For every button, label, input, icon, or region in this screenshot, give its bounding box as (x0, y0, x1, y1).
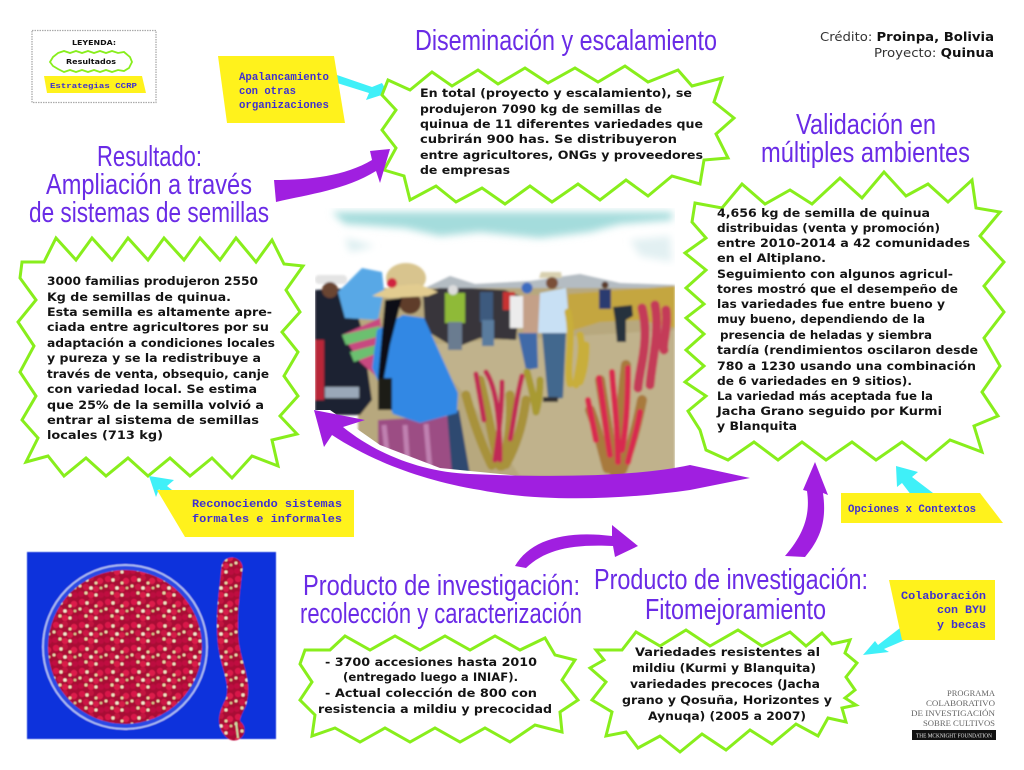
heading: recolección: recolección y caracterización (300, 598, 582, 630)
panel: validación: Jacha Grano seguido por Kurmi (716, 405, 942, 418)
panel: resultado: 3000 familias produjeron 2550 (47, 275, 258, 288)
panel: validación: presencia de heladas y siembra (720, 329, 932, 342)
panel: diseminación: de empresas (420, 164, 510, 177)
legend: Estrategias CCRP (50, 83, 138, 91)
label: opciones por contextos (841, 493, 1003, 523)
heading: resultado (29, 141, 269, 229)
person in beige (518, 282, 540, 370)
label: colaboración: y becas (937, 620, 986, 632)
heading: fitomejoramiento: Producto de investigación: (594, 564, 868, 596)
legend (32, 30, 156, 102)
photo: farmers in quinoa field (315, 208, 675, 478)
heading: resultado: Resultado: (97, 141, 202, 173)
panel: validación: y Blanquita (717, 420, 797, 433)
panel: diseminación (382, 66, 734, 204)
logo: programa colaborativo: DE INVESTIGACIÓN (911, 708, 995, 718)
credit: Crédito: Proinpa, Bolivia (820, 30, 994, 44)
legend: Resultados (66, 57, 117, 66)
panel: recolección (300, 636, 578, 742)
logo: programa colaborativo: SOBRE CULTIVOS (923, 719, 995, 728)
panel: validación: tardía (rendimientos oscilaron desde (717, 344, 978, 357)
heading: fitomejoramiento: Fitomejoramiento (645, 594, 826, 626)
logo: programa colaborativo (911, 689, 996, 740)
heading: recolección (300, 570, 582, 630)
panel: validación: La variedad más aceptada fue la (717, 390, 933, 403)
panel: resultado: locales (713 kg) (47, 429, 163, 442)
logo: programa colaborativo: PROGRAMA (947, 689, 995, 698)
panel: resultado: que 25% de la semilla volvió a (47, 399, 264, 412)
title: diseminación: Diseminación y escalamiento (415, 25, 717, 57)
heading: fitomejoramiento (594, 564, 868, 626)
panel: fitomejoramiento: variedades precoces (Jacha (630, 678, 820, 691)
panel: resultado: con variedad local. Se estima (47, 383, 257, 396)
panel: validación: 780 a 1230 usando una combinación (717, 360, 976, 373)
legend: LEYENDA: (72, 38, 116, 47)
panel: fitomejoramiento: Variedades resistentes al (635, 646, 820, 659)
label: colaboración: Colaboración (901, 591, 986, 603)
panel: validación: entre 2010-2014 a 42 comunidades (717, 237, 970, 250)
arrow: recolección to fitomejoramiento (515, 525, 638, 568)
crowd behind (423, 288, 520, 348)
panel: resultado: ciada entre agricultores por su (47, 321, 269, 334)
quinoa plants (466, 305, 666, 472)
panel: diseminación: cubrirán 900 has. Se distribuyeron (420, 133, 677, 146)
arrow: validación to resultado (large) (314, 410, 750, 498)
credit: Proyecto: Quinua (874, 46, 994, 60)
panel: resultado (18, 238, 303, 478)
woman in blue (372, 263, 470, 474)
panel: recolección: - Actual colección de 800 con (325, 687, 537, 700)
logo: programa colaborativo: COLABORATIVO (926, 699, 995, 708)
panel: validación: muy bueno, dependiendo de la (717, 313, 925, 326)
label: opciones por contextos: Opciones x Contextos (848, 504, 976, 516)
heading: resultado: de sistemas de semillas (29, 197, 269, 229)
label: reconociendo: formales e informales (192, 514, 342, 526)
credit (820, 30, 994, 60)
panel: validación: Seguimiento con algunos agricul- (717, 268, 953, 281)
label: apalancamiento: Apalancamiento (239, 72, 329, 84)
label: apalancamiento (218, 56, 345, 123)
panel: validación: tores mostró que el desempeño de (717, 283, 958, 296)
panel: diseminación: entre agricultores, ONGs y proveedores (420, 149, 703, 162)
panel: validación: en el Altiplano. (717, 252, 826, 265)
panel: validación: las variedades fue entre bueno y (717, 298, 946, 311)
photo: quinoa seeds on blue (27, 552, 276, 739)
label: reconociendo: Reconociendo sistemas (192, 499, 342, 511)
panel: diseminación: quinua de 11 diferentes variedades que (420, 118, 703, 131)
panel: validación: de 6 variedades en 9 sitios). (717, 375, 912, 388)
back people (599, 289, 611, 309)
panel: diseminación: En total (proyecto y escalamiento), se (420, 87, 692, 100)
arrow: opciones to validación (896, 466, 933, 500)
man in blue shirt (538, 272, 570, 402)
heading: validación: Validación en (796, 109, 936, 141)
panel: resultado: Esta semilla es altamente apre- (47, 306, 272, 319)
panel: validación: distribuidas (venta y promoción) (717, 222, 940, 235)
panel: diseminación: produjeron 7090 kg de semillas de (420, 103, 662, 116)
arrow: fitomejoramiento to validación (785, 462, 828, 557)
label: colaboración: con BYU (937, 605, 986, 617)
left crowd (315, 288, 372, 415)
heading: validación: múltiples ambientes (761, 137, 970, 169)
arrow: reconociendo to resultado (149, 476, 195, 516)
heading: recolección: Producto de investigación: (303, 570, 580, 602)
arrow: apalancamiento to diseminación (337, 75, 388, 100)
panel: recolección: (entregado luego a INIAF). (343, 671, 518, 684)
panel: validación (685, 172, 1004, 460)
logo: programa colaborativo: THE MCKNIGHT FOUNDATION (916, 734, 993, 740)
panel: resultado: Kg de semillas de quinua. (47, 291, 231, 304)
label: reconociendo (157, 490, 354, 537)
panel: fitomejoramiento: mildiu (Kurmi y Blanquita) (632, 662, 816, 675)
panel: fitomejoramiento (590, 630, 857, 752)
label: apalancamiento: con otras (239, 86, 296, 98)
panel: resultado: y pureza y se la redistribuye a (47, 352, 261, 365)
arrow: colaboración to fitomejoramiento (863, 628, 905, 655)
panel: resultado: través de venta, obsequio, canje (47, 368, 269, 381)
label: colaboración (889, 580, 995, 640)
label: apalancamiento: organizaciones (239, 100, 329, 112)
panel: resultado: entrar al sistema de semillas (47, 414, 259, 427)
panel: validación: 4,656 kg de semilla de quinua (717, 207, 930, 220)
heading: validación (761, 109, 970, 169)
panel: recolección: - 3700 accesiones hasta 2010 (325, 656, 537, 669)
panel: fitomejoramiento: Aynuqa) (2005 a 2007) (648, 710, 806, 723)
arrow: resultado to diseminación (274, 149, 390, 202)
panel: fitomejoramiento: grano y Qosuña, Horizontes y (622, 694, 833, 707)
panel: resultado: adaptación a condiciones locales (47, 337, 275, 350)
heading: resultado: Ampliación a través (46, 169, 252, 201)
panel: recolección: resistencia a mildiu y precocidad (318, 703, 552, 716)
